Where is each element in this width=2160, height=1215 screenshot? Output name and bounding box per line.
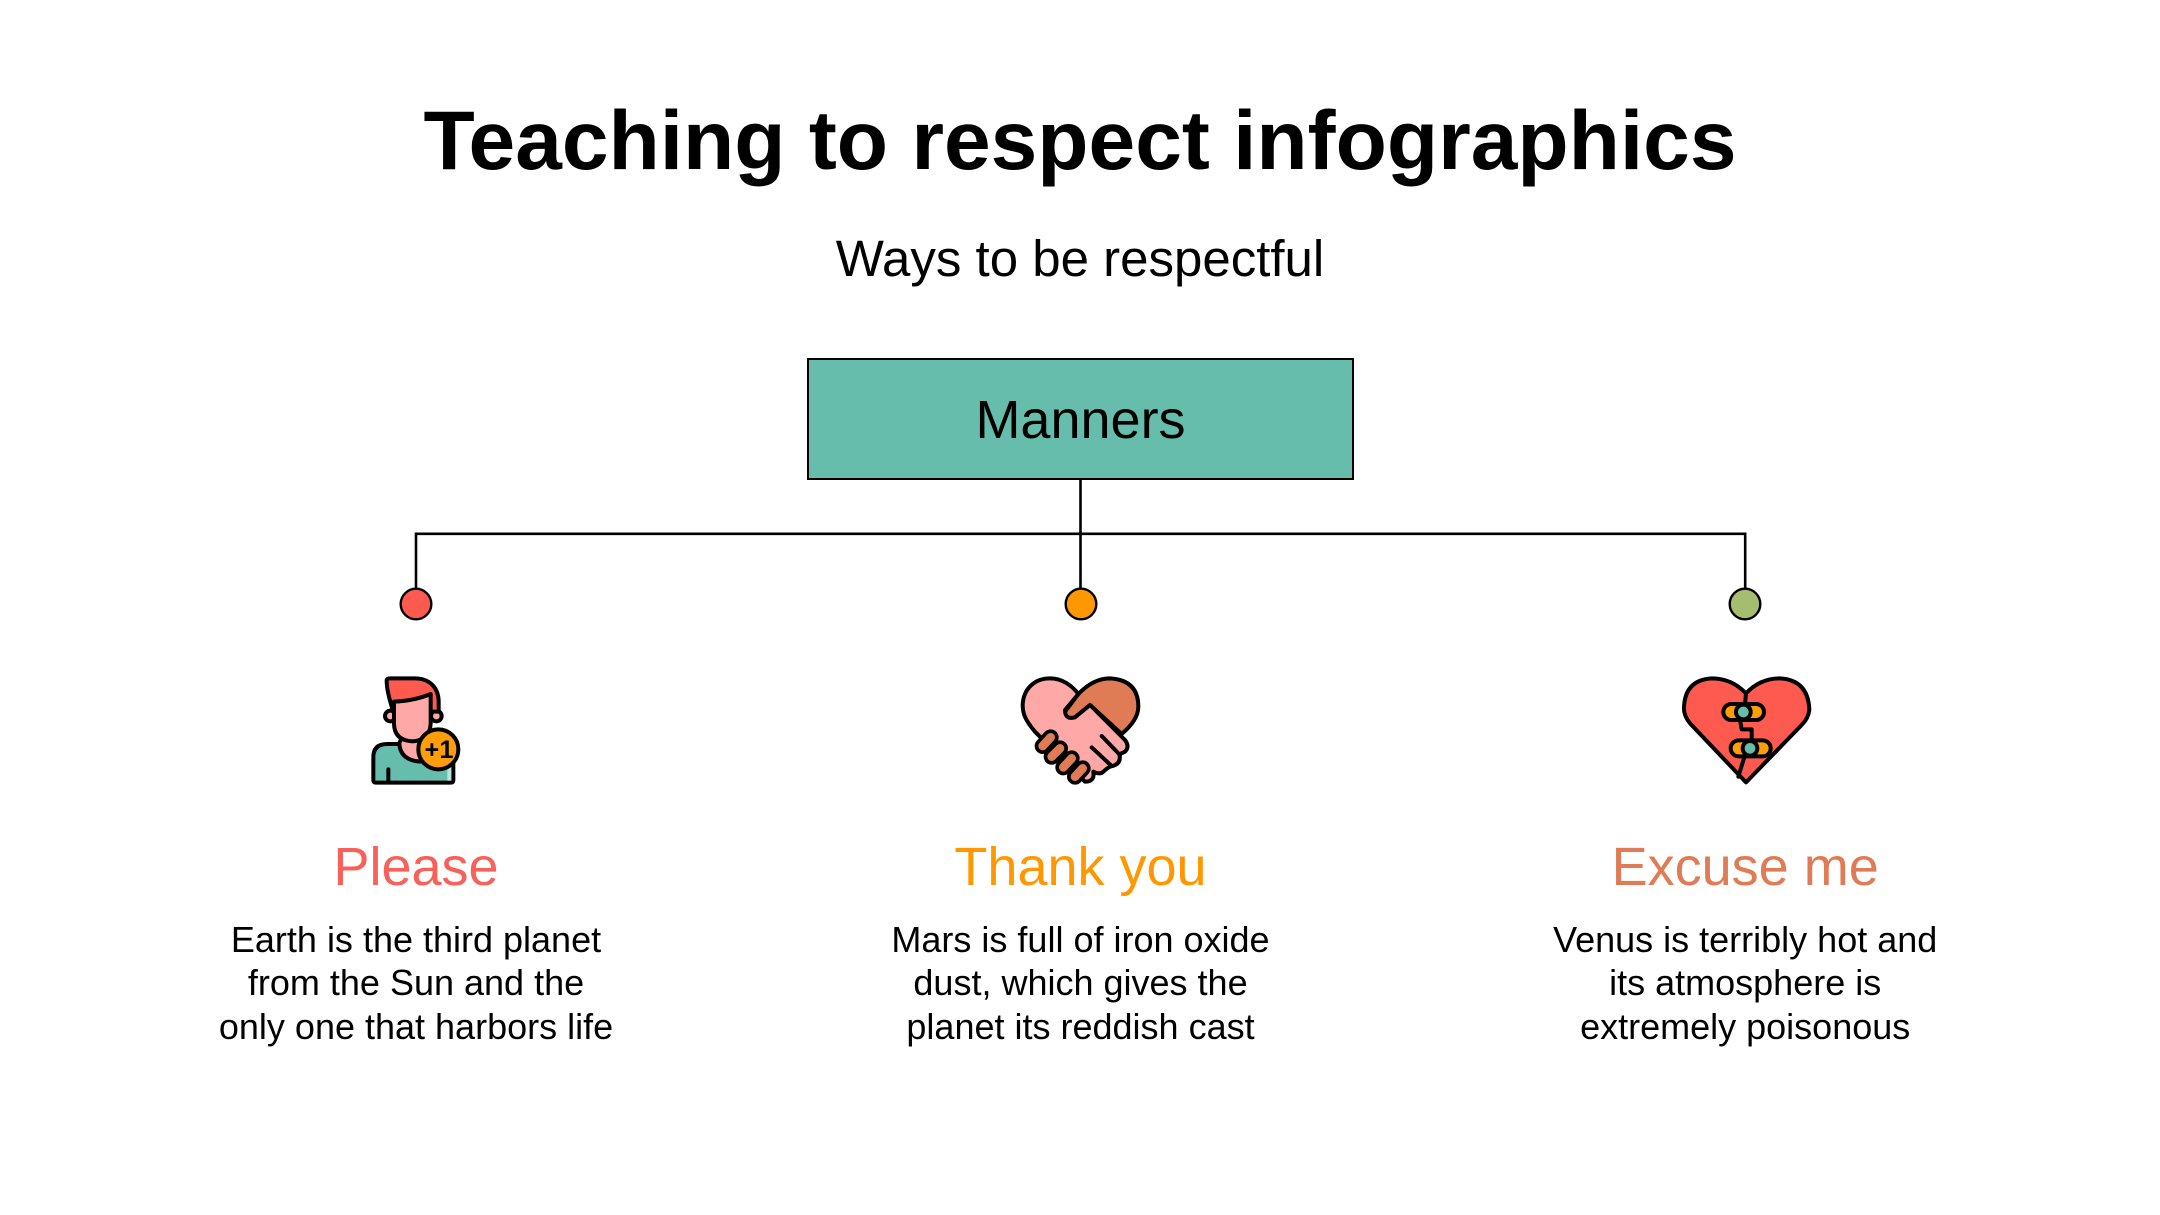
- text: Please description: [219, 919, 613, 1047]
- column: Thank you: [891, 837, 1270, 1047]
- text: Please description: only one that harbors life: [219, 1006, 613, 1047]
- text: Thank you description: planet its reddish cast: [906, 1006, 1255, 1047]
- node: green dot: [1728, 588, 1762, 620]
- title: Teaching to respect infographics: [424, 93, 1736, 187]
- text: Thank you description: Mars is full of iron oxide: [891, 919, 1270, 960]
- column: Excuse me: [1553, 837, 1937, 1047]
- column: Please: [219, 837, 613, 1047]
- text: Excuse me description: extremely poisonous: [1580, 1006, 1910, 1047]
- text: Please description: from the Sun and the: [248, 962, 584, 1003]
- icon: mended heart with bandages: [1682, 676, 1812, 784]
- text: Thank you description: dust, which gives the: [913, 962, 1248, 1003]
- icon: heart handshake: [1020, 676, 1140, 785]
- heading: Thank you: Thank you: [954, 837, 1207, 897]
- box: Manners: [807, 358, 1354, 480]
- text: Excuse me description: [1553, 919, 1937, 1047]
- heading: Please: Please: [333, 837, 499, 897]
- text: Please description: Earth is the third planet: [231, 919, 601, 960]
- icon: person with plus one badge: +1: [425, 736, 453, 764]
- heading: Excuse me: Excuse me: [1612, 837, 1879, 897]
- text: Thank you description: [891, 919, 1270, 1047]
- node: orange dot: [1064, 588, 1098, 620]
- icon: person with plus one badge: [371, 676, 460, 785]
- text: Excuse me description: its atmosphere is: [1609, 962, 1881, 1003]
- box: Manners: Manners: [975, 390, 1186, 450]
- subtitle: Ways to be respectful: [836, 230, 1324, 287]
- node: red dot: [400, 588, 432, 620]
- text: Excuse me description: Venus is terribly hot and: [1553, 919, 1937, 960]
